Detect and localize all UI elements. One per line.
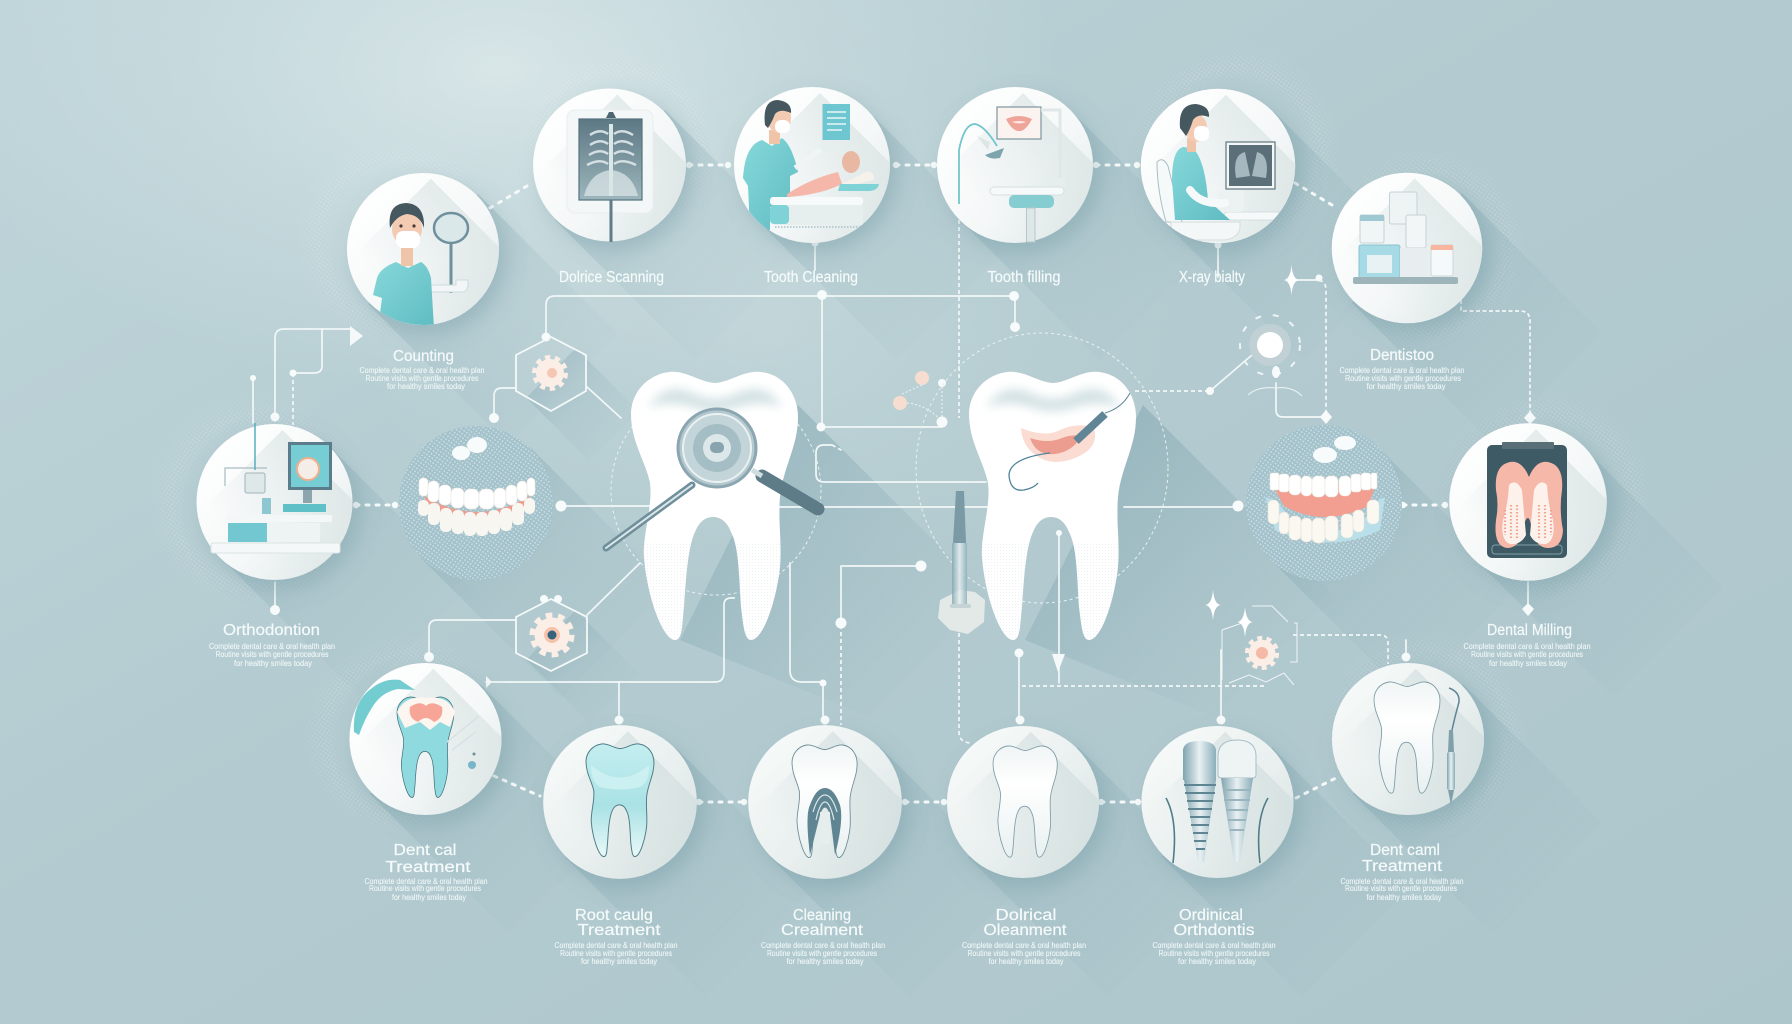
heading: Ordinical	[1179, 907, 1243, 924]
panel: orthodontics	[196, 423, 384, 668]
panel: root canal treatment right	[1332, 663, 1515, 902]
description	[554, 941, 678, 966]
sparkle node	[1240, 265, 1302, 396]
heading: Treatment	[1362, 858, 1443, 875]
central tooth with magnifier	[606, 372, 818, 640]
panel: damaged smile	[1246, 425, 1402, 581]
description: Complete dental care & oral health plan	[1340, 877, 1464, 886]
top bus lines	[542, 240, 1222, 432]
description	[962, 941, 1086, 966]
description: for healthy smiles today	[387, 382, 465, 391]
description: Complete dental care & oral health plan	[360, 366, 484, 375]
description: for healthy smiles today	[392, 893, 466, 902]
icon: dental implants	[1166, 740, 1268, 863]
crown shading	[986, 389, 1120, 411]
description	[1464, 642, 1590, 668]
description: Routine visits with gentle procedures	[968, 949, 1080, 958]
description: Complete dental care & oral health plan	[1340, 366, 1464, 375]
icon: upper and lower teeth	[418, 437, 535, 536]
description	[209, 642, 335, 668]
heading: Dentistoo	[1370, 347, 1434, 364]
panel: root canal treatment left	[349, 663, 533, 902]
heading: X-ray bialty	[1179, 269, 1245, 286]
heading: Orthdontis	[1174, 922, 1255, 939]
description: for healthy smiles today	[988, 957, 1064, 966]
description: Routine visits with gentle procedures	[369, 884, 481, 893]
heading: Dolrice Scanning	[559, 269, 664, 286]
panel: counting	[347, 173, 511, 390]
description: for healthy smiles today	[234, 659, 312, 668]
heading: Treatment	[578, 922, 661, 939]
icon: tooth with root section	[792, 745, 857, 858]
crown shading	[648, 389, 782, 411]
dental probe	[1009, 393, 1130, 490]
description	[1152, 941, 1276, 966]
heading: Dent cal	[394, 842, 456, 859]
description: Complete dental care & oral health plan	[962, 941, 1086, 950]
sparkle gear node	[1205, 590, 1276, 667]
description: Routine visits with gentle procedures	[1345, 374, 1461, 383]
heading: Dolrical	[996, 907, 1056, 924]
heading: Orthodontion	[223, 622, 320, 639]
peach nodes near first connector	[893, 371, 942, 422]
dashed vertical left of second tooth	[959, 213, 972, 743]
heading	[781, 907, 864, 939]
heading: Oleanment	[984, 922, 1067, 939]
description: Routine visits with gentle procedures	[216, 650, 328, 659]
handpiece instrument	[938, 491, 985, 634]
description	[1340, 877, 1464, 902]
heading: Dental Milling	[1487, 622, 1572, 639]
description: Routine visits with gentle procedures	[767, 949, 877, 958]
heading: Counting	[393, 348, 454, 365]
icon: teal tooth	[586, 744, 654, 857]
description: for healthy smiles today	[1178, 957, 1256, 966]
gear hexagon links	[424, 387, 640, 662]
right side links	[270, 274, 1536, 616]
description: for healthy smiles today	[581, 957, 657, 966]
central tooth with cavity	[969, 372, 1136, 640]
lower right bus lines	[1014, 530, 1410, 724]
description	[1340, 366, 1464, 391]
panel: x-ray scanning	[533, 89, 717, 286]
heading	[1362, 842, 1443, 875]
icon: dentist with mirror	[373, 203, 468, 328]
panel: dolrical treatment	[947, 726, 1130, 966]
heading	[1174, 907, 1255, 939]
description	[364, 877, 488, 902]
description: Routine visits with gentle procedures	[366, 374, 478, 383]
lower left bus lines	[486, 560, 926, 725]
heading	[984, 907, 1067, 939]
panel: root canal treatment	[543, 725, 728, 966]
heading: Treatment	[386, 859, 471, 876]
description: Complete dental care & oral health plan	[554, 941, 678, 950]
icon: operator at monitor	[1157, 104, 1280, 240]
panel: cleaning treatment	[748, 725, 933, 966]
heading: Cleaning	[793, 907, 851, 924]
panel: x-ray viewing	[1141, 89, 1327, 286]
dotted arcs around central teeth	[611, 333, 1168, 603]
description: for healthy smiles today	[786, 957, 864, 966]
description: for healthy smiles today	[1366, 893, 1442, 902]
heading	[575, 907, 661, 939]
panel: tooth filling	[937, 87, 1125, 286]
long diagonal shadows	[220, 110, 1723, 997]
description: Complete dental care & oral health plan	[761, 941, 885, 950]
heading: Crealment	[781, 922, 864, 939]
icon: teeth with gum detail	[1265, 436, 1385, 543]
description: Complete dental care & oral health plan	[364, 877, 488, 886]
description: Routine visits with gentle procedures	[1345, 884, 1457, 893]
icon: white tooth	[993, 746, 1057, 857]
icon: tooth with probe	[1374, 682, 1459, 805]
heading	[386, 842, 471, 876]
icon: dental chair unit	[959, 107, 1065, 242]
icon: dentist and patient	[743, 100, 879, 230]
dotted links between discs	[353, 162, 1448, 805]
icon: shelf of jars	[1353, 192, 1458, 284]
left upper links	[250, 326, 363, 425]
description: Routine visits with gentle procedures	[560, 949, 672, 958]
icon: x-ray film	[567, 110, 653, 242]
description: Complete dental care & oral health plan	[1464, 642, 1590, 651]
central horizontal lines	[556, 445, 1244, 512]
panel: orthodontic implants	[1141, 726, 1325, 966]
panel: tooth cleaning	[734, 87, 922, 286]
panel: dentistry supplies	[1332, 173, 1513, 391]
gear hexagon bottom	[516, 599, 587, 671]
description	[761, 941, 885, 966]
icon: treated tooth with hand	[354, 680, 479, 798]
description: Complete dental care & oral health plan	[1152, 941, 1276, 950]
icon: tooth cross-section clipboard	[1487, 442, 1567, 558]
description: Complete dental care & oral health plan	[209, 642, 335, 651]
heading: Dent caml	[1370, 842, 1440, 859]
heading: Tooth filling	[988, 269, 1060, 286]
description: Routine visits with gentle procedures	[1158, 949, 1270, 958]
connector network	[250, 162, 1536, 805]
description	[360, 366, 484, 391]
heading: Root caulg	[575, 907, 653, 924]
halftone dot halos around discs	[145, 42, 1657, 843]
panel: dental milling	[1449, 423, 1639, 668]
panel: healthy smile	[399, 426, 553, 580]
icon: dental workstation	[211, 423, 340, 553]
description: Routine visits with gentle procedures	[1471, 650, 1583, 659]
gear hexagon top	[516, 337, 586, 411]
description: for healthy smiles today	[1489, 659, 1567, 668]
description: for healthy smiles today	[1366, 382, 1446, 391]
magnifier	[606, 409, 818, 548]
heading: Tooth Cleaning	[764, 269, 858, 286]
cavity	[1021, 425, 1095, 462]
